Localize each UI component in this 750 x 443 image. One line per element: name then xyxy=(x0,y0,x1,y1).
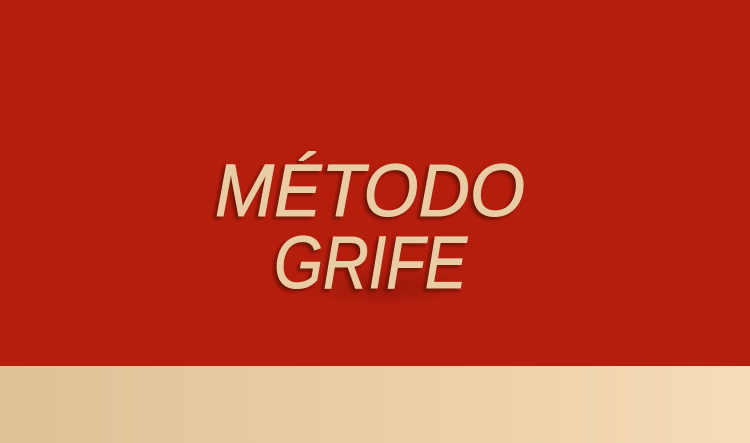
soft shadow beneath title xyxy=(295,267,475,307)
panel: beige bottom band xyxy=(0,366,750,443)
title line 2: GRIFE xyxy=(274,221,468,304)
title xyxy=(215,149,525,304)
title line 1: MÉTODO xyxy=(215,149,525,232)
